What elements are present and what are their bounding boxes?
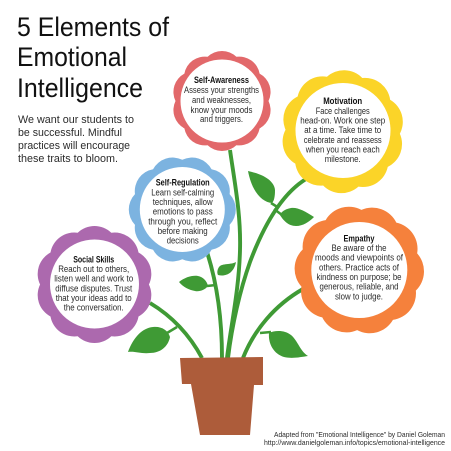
intro text: these traits to bloom. (18, 153, 118, 165)
flower: social skills: that your ideas add to (56, 293, 132, 303)
flower: empathy: Be aware of the (332, 243, 387, 253)
intro text: be successful. Mindful (18, 127, 122, 139)
flower: self-awareness: and triggers. (200, 114, 243, 124)
flower: self-regulation: through you, reflect (148, 216, 218, 226)
flower: social skills: listen well and work to (54, 274, 133, 284)
flower: self-regulation: decisions (167, 236, 199, 246)
flower: motivation: at a time. Take time to (304, 125, 381, 135)
flower: empathy: moods and viewpoints of (315, 253, 403, 263)
flower: self-regulation: before making (158, 226, 208, 236)
flower: self-awareness: and weaknesses, (192, 95, 251, 105)
attribution: http://www.danielgoleman.info/topics/emotional-intelligence (264, 438, 445, 447)
leaf: social skills stem (128, 327, 177, 353)
leaf: self-regulation stem (179, 276, 216, 291)
title: Emotional (17, 42, 127, 72)
flower: self-awareness (159, 39, 285, 163)
flower: self-regulation: Self-Regulation (156, 177, 210, 187)
leaf: right of self-regulation stem (217, 262, 236, 275)
flower: social skills: diffuse disputes. Trust (55, 283, 133, 293)
flower: social skills: Social Skills (73, 254, 114, 264)
leaf: empathy stem (260, 331, 308, 358)
plant stems (150, 150, 306, 358)
intro text: We want our students to (18, 114, 134, 126)
flower: motivation: head-on. Work one step (300, 116, 385, 126)
flower: self-regulation: techniques, allow (153, 197, 213, 207)
intro text (18, 114, 134, 165)
flower pot (180, 357, 263, 435)
flower: motivation (264, 55, 421, 209)
flower: self-awareness: Assess your strengths (184, 85, 259, 95)
flower: motivation: Face challenges (316, 106, 370, 116)
flower: motivation: Motivation (323, 96, 362, 106)
flower: empathy: slow to judge. (335, 291, 383, 301)
flower: empathy: kindness on purpose; be (316, 272, 402, 282)
attribution (264, 430, 445, 447)
flower: social skills (21, 212, 168, 357)
flower: empathy: others. Practice acts of (319, 262, 399, 272)
flower: motivation: celebrate and reassess (304, 135, 382, 145)
flower: motivation: milestone. (325, 154, 361, 164)
flower: empathy: Empathy (344, 233, 375, 243)
leaf: upper left of motivation stem (248, 171, 279, 208)
flower: self-regulation: Learn self-calming (151, 187, 214, 197)
flower: empathy: generous, reliable, and (320, 282, 399, 292)
leaf: right of motivation stem (274, 208, 314, 226)
flower: self-regulation (129, 158, 236, 261)
flower: social skills: Reach out to others, (58, 264, 129, 274)
title (17, 12, 170, 103)
flower: motivation: when you reach each (305, 145, 380, 155)
flower: empathy (292, 205, 426, 335)
flower: self-awareness: Self-Awareness (194, 75, 249, 85)
title: Intelligence (17, 73, 143, 103)
flower: self-awareness: know your moods (190, 105, 253, 115)
flower: social skills: the conversation. (64, 303, 124, 313)
title: 5 Elements of (17, 12, 170, 42)
intro text: practices will encourage (18, 140, 130, 152)
flower: self-regulation: emotions to pass (153, 207, 213, 217)
